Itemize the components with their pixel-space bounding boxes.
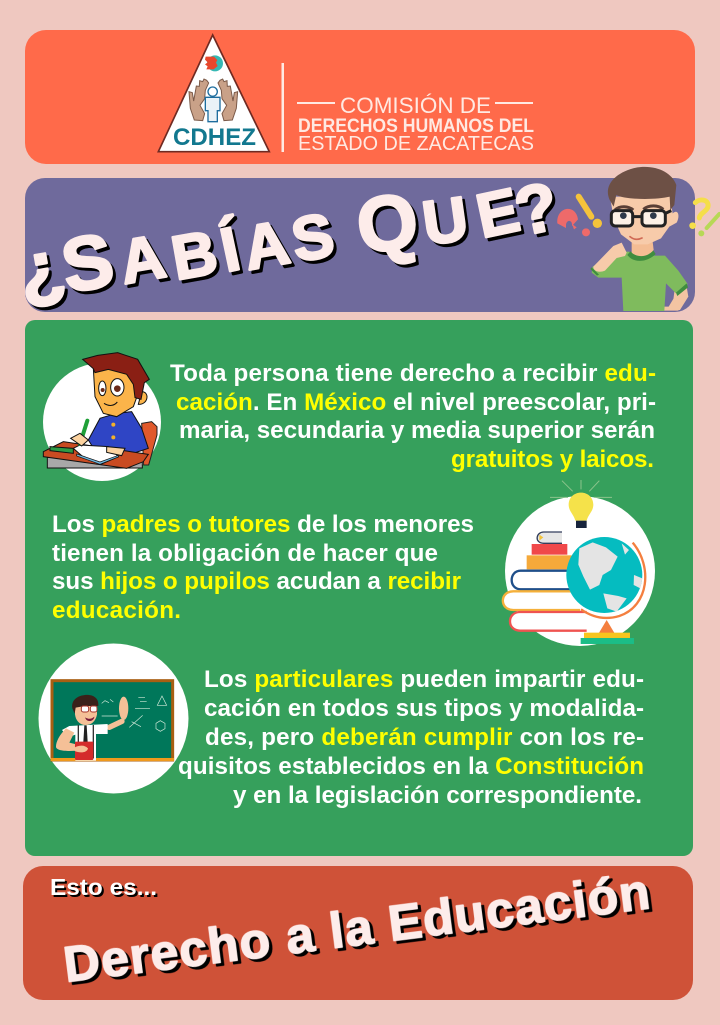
text: paragraph 3: Los particulares pueden impartir edu- (204, 666, 644, 693)
text: sus hijos o pupilos acudan a recibir (52, 568, 462, 595)
text: maria, secundaria y media superior serán (179, 417, 655, 444)
heading: ¿Sabías que?: A (238, 208, 295, 284)
heading: ¿Sabías que?: U (418, 184, 472, 259)
heading: Derecho a la Educación: Derecho a la Educación (60, 863, 653, 993)
icon: CDHEZ logo: CDHEZ (173, 124, 256, 151)
text: Esto es...: Esto es... (50, 874, 157, 900)
heading: ¿Sabías que?: S (55, 217, 120, 310)
text: paragraph 1: Toda persona tiene derecho a recibir edu- (170, 360, 656, 387)
text: quisitos establecidos en la Constitución (178, 753, 644, 780)
icon: CDHEZ logo (158, 35, 269, 152)
text: tienen la obligación de hacer que (52, 540, 438, 567)
heading: ¿Sabías que?: E (471, 176, 525, 252)
heading: ¿Sabías que?: A (114, 222, 171, 298)
panel: education content (25, 320, 693, 856)
heading: ¿Sabías que?: Í (215, 214, 247, 286)
heading: ¿Sabías que?: Q (351, 175, 423, 271)
text: gratuitos y laicos. (451, 446, 654, 473)
panel: header (25, 30, 695, 164)
text: educación. (52, 597, 181, 624)
text: institution name: DERECHOS HUMANOS DEL (298, 116, 534, 137)
panel: ¿Sabías que? (25, 178, 695, 312)
heading: ¿Sabías que?: S (286, 201, 339, 276)
text: cación. En México el nivel preescolar, pri- (176, 389, 656, 416)
icon: thinking man (557, 167, 719, 311)
heading: ¿Sabías que?: ¿ (11, 223, 70, 313)
icon: teacher at blackboard (38, 644, 188, 794)
text: institution name: COMISIÓN DE (340, 93, 491, 118)
text: cación en todos sus tipos y modalida- (204, 695, 644, 722)
icon: books, globe and light bulb (503, 480, 655, 646)
text: institution name: ESTADO DE ZACATECAS (298, 133, 534, 155)
heading: ¿Sabías que?: ? (508, 168, 565, 251)
heading: ¿Sabías que?: B (166, 218, 223, 294)
text: y en la legislación correspondiente. (233, 782, 642, 809)
text: des, pero deberán cumplir con los re- (205, 724, 644, 751)
text: institution name (298, 93, 534, 155)
text: paragraph 2: Los padres o tutores de los menores (52, 511, 474, 538)
panel: conclusion (23, 866, 693, 1000)
icon: student at desk (43, 353, 161, 481)
